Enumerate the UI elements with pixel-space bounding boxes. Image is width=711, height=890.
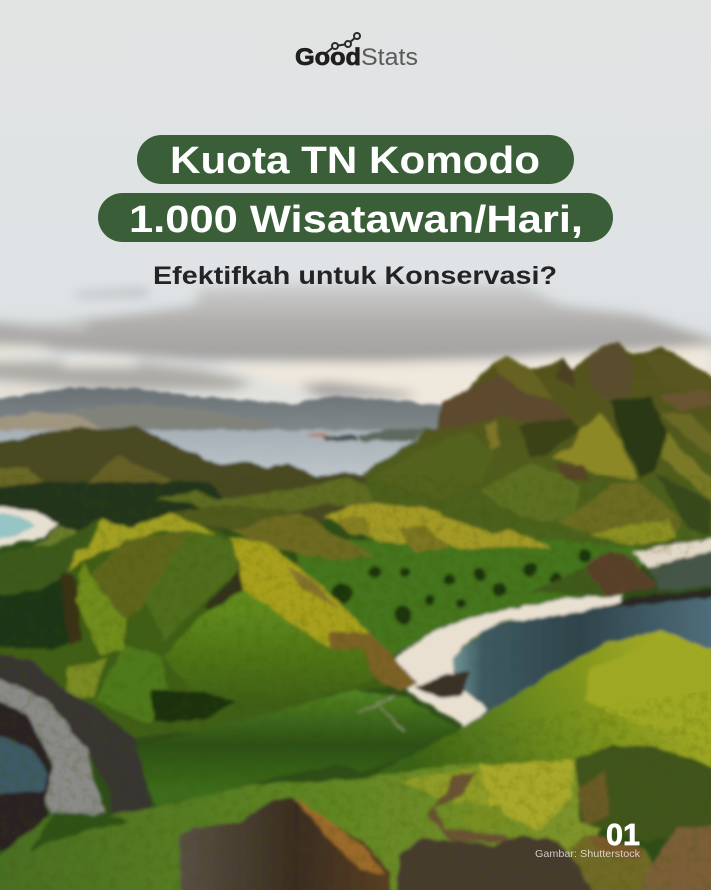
image credit: Gambar: Shutterstock — [535, 848, 641, 860]
green ridge — [145, 530, 240, 640]
left dark band — [0, 575, 75, 650]
landscape — [0, 342, 711, 890]
lower left lit patch — [67, 657, 107, 697]
right ridge — [660, 433, 711, 515]
subtitle: Efektifkah untuk Konservasi? — [153, 262, 557, 290]
left causeway and lagoon — [0, 650, 154, 855]
rock shoulder — [660, 390, 711, 412]
sky background — [0, 0, 711, 440]
bright right hill — [363, 630, 711, 795]
main bay water — [450, 595, 711, 722]
right peaks rock — [587, 342, 633, 400]
big left lit hill — [0, 513, 417, 740]
lit lower face — [75, 562, 125, 655]
rounded hill — [480, 463, 580, 522]
brand logo — [295, 33, 418, 71]
dusky upper face — [90, 530, 190, 620]
lit yellow hills — [170, 503, 553, 560]
right lower hill — [557, 483, 683, 545]
logo chart line — [326, 33, 360, 53]
summit rock — [440, 375, 575, 430]
foreground rocks — [179, 797, 711, 890]
logo wordmark: Good — [295, 44, 361, 71]
left small bay — [0, 505, 92, 555]
clouds — [0, 284, 711, 420]
yellow ridge — [550, 413, 637, 480]
yellow top — [68, 513, 215, 572]
green valley — [290, 540, 650, 660]
sea — [0, 430, 450, 490]
distant mountains — [0, 387, 442, 432]
title pill: line 2: 1.000 Wisatawan/Hari, — [129, 199, 583, 241]
valley trees — [333, 549, 592, 624]
dark rock notch — [203, 570, 243, 612]
left mass lit patch — [485, 420, 500, 450]
land base fill — [0, 500, 711, 890]
texture overlay — [0, 430, 711, 890]
title pill: line 2 — [98, 193, 613, 242]
dark central valley — [610, 397, 667, 478]
dark trees — [150, 690, 235, 722]
title pill: line 1: Kuota TN Komodo — [170, 140, 540, 182]
small islands — [308, 428, 425, 441]
headland and upper beach — [530, 536, 711, 615]
dark strip — [60, 573, 82, 645]
big right mountain — [362, 342, 711, 560]
title pill: line 1 — [137, 135, 574, 184]
summit grass — [493, 357, 555, 400]
brown cliff — [328, 632, 417, 692]
main beach — [395, 596, 622, 728]
hill base — [0, 513, 417, 740]
center green hill — [136, 690, 458, 805]
page number: 01 — [606, 817, 640, 852]
brand logo: Stats — [361, 44, 418, 71]
left ridge hills — [0, 426, 385, 545]
bright slope — [230, 537, 370, 647]
bush on right — [576, 745, 711, 842]
green face — [163, 590, 373, 712]
foreground grass — [0, 760, 600, 890]
